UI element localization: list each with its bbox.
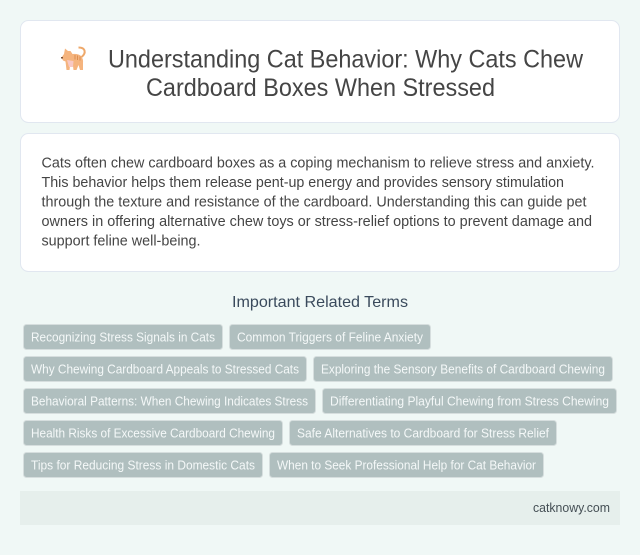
- tag: Recognizing Stress Signals in Cats: [31, 330, 215, 344]
- tag: [322, 388, 616, 414]
- icon: cat: [61, 48, 85, 70]
- tag: Tips for Reducing Stress in Domestic Cats: [31, 458, 255, 472]
- tag: [290, 420, 556, 446]
- tag: Why Chewing Cardboard Appeals to Stressed Cats: [31, 362, 299, 376]
- title: Understanding Cat Behavior: Why Cats Chew: [108, 46, 584, 74]
- description text: Cats often chew cardboard boxes as a coping mechanism to relieve stress and anxiety.: [42, 156, 594, 172]
- description text: This behavior helps them release pent-up energy and provides sensory stimulation: [42, 175, 564, 191]
- tag: [24, 356, 306, 382]
- footer: [20, 491, 620, 525]
- tag: Behavioral Patterns: When Chewing Indicates Stress: [31, 394, 308, 408]
- panel: title card: [20, 20, 620, 122]
- description text: [42, 156, 594, 250]
- tag: [24, 452, 262, 478]
- tag: [314, 356, 612, 382]
- heading: related terms: Important Related Terms: [232, 294, 408, 311]
- tag: [24, 388, 316, 414]
- tag: When to Seek Professional Help for Cat Behavior: [277, 458, 536, 472]
- tag: Differentiating Playful Chewing from Stress Chewing: [330, 394, 609, 408]
- footer source text: catknowy.com: [533, 500, 610, 515]
- tag: Exploring the Sensory Benefits of Cardboard Chewing: [321, 362, 605, 376]
- tag: Safe Alternatives to Cardboard for Stress Relief: [297, 426, 549, 440]
- tag: Common Triggers of Feline Anxiety: [237, 330, 424, 344]
- related terms tags: [24, 324, 616, 478]
- description text: support feline well-being.: [42, 234, 200, 250]
- description text: owners in offering alternative chew toys or stress-relief options to prevent damage and: [42, 214, 592, 230]
- tag: Health Risks of Excessive Cardboard Chewing: [31, 426, 275, 440]
- description text: through the texture and resistance of the cardboard. Understanding this can guide pet: [42, 194, 586, 210]
- title: [108, 46, 584, 102]
- tag: [24, 324, 222, 350]
- title: Cardboard Boxes When Stressed: [146, 74, 495, 102]
- panel: description: [20, 134, 620, 272]
- tag: [270, 452, 544, 478]
- tag: [230, 324, 430, 350]
- tag: [24, 420, 282, 446]
